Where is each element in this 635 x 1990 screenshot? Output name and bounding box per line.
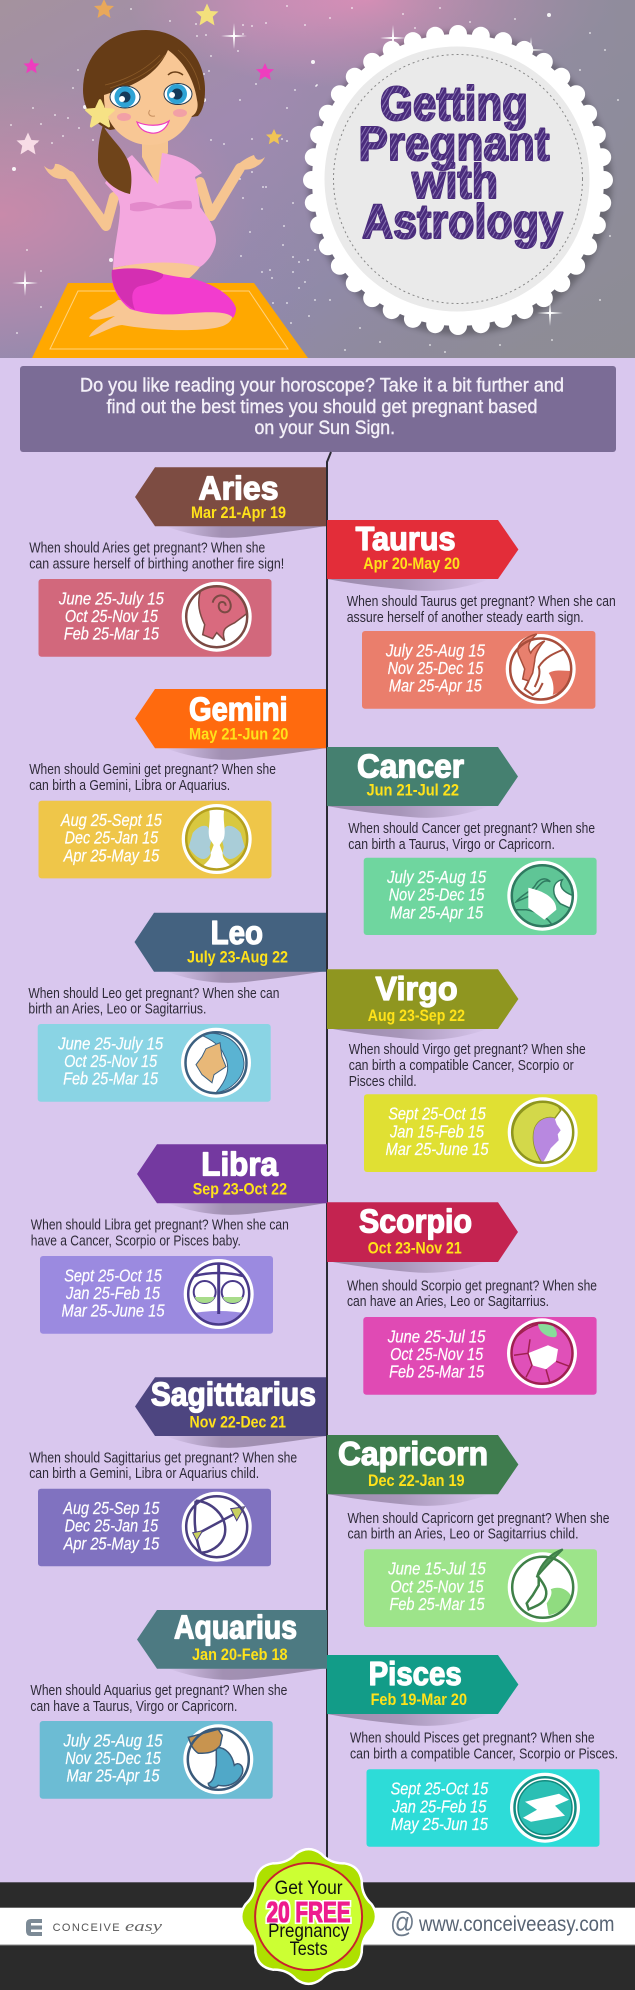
date box [38, 1489, 271, 1566]
best times: Jan 25-Feb 15 [65, 1283, 160, 1303]
dates: Mar 21-Apr 19 [191, 503, 286, 522]
shirt tie [130, 201, 192, 211]
dates: Oct 23-Nov 21 [368, 1238, 462, 1257]
badge text: Get Your [275, 1878, 343, 1899]
icon: fish [510, 1773, 580, 1843]
description: have a Cancer, Scorpio or Pisces baby. [31, 1232, 241, 1250]
blush and nose [117, 109, 187, 121]
dates: Jan 20-Feb 18 [192, 1645, 288, 1664]
best times: Oct 25-Nov 15 [65, 606, 158, 626]
date box [363, 1317, 597, 1395]
best times: Dec 25-Jan 15 [65, 1516, 158, 1536]
best times: June 15-Jul 15 [387, 1559, 486, 1579]
best times: Jan 15-Feb 15 [389, 1121, 484, 1141]
best times: Feb 25-Mar 15 [64, 624, 159, 644]
belly [113, 263, 200, 279]
description: can birth a Taurus, Virgo or Capricorn. [348, 836, 555, 853]
timeline spine [327, 452, 331, 1862]
badge shape [241, 1849, 376, 1984]
banner shadow [327, 579, 490, 591]
banner [327, 1202, 518, 1262]
dates: Nov 22-Dec 21 [190, 1412, 286, 1431]
illustration: pregnant woman [44, 30, 265, 337]
website: www.conceiveeasy.com [418, 1913, 614, 1936]
free tests badge [241, 1849, 376, 1984]
best times: June 25-July 15 [57, 1033, 163, 1053]
date box [38, 1024, 271, 1102]
scalloped frame shadow [308, 31, 612, 335]
banner shadow [327, 806, 490, 818]
banner [135, 1377, 326, 1436]
icon: lion [181, 1028, 251, 1098]
banner shadow [327, 1714, 490, 1726]
description: birth an Aries, Leo or Sagitarrius. [28, 1000, 206, 1018]
sign name: Taurus [356, 520, 456, 557]
smile [137, 121, 169, 133]
icon: water bearer [183, 1724, 253, 1794]
flower [86, 100, 114, 126]
intro panel [20, 366, 616, 452]
dates: Jun 21-Jul 22 [366, 780, 459, 799]
badge text [267, 1878, 351, 1960]
sparkles [12, 23, 563, 326]
description: can birth a Gemini, Libra or Aquarius. [29, 777, 230, 794]
banner [135, 689, 326, 748]
sign name: Gemini [189, 691, 288, 728]
panel: Aquarius [30, 1609, 327, 1799]
sign name: Scorpio [359, 1203, 472, 1240]
best times: Nov 25-Dec 15 [65, 1748, 161, 1768]
icon: ram [182, 582, 252, 652]
intro panel: Do you like reading your horoscope? Take it a bit further and [80, 376, 564, 396]
panel: footer [0, 1849, 635, 1990]
description: can have an Aries, Leo or Sagitarrius. [347, 1293, 549, 1310]
best times: Oct 25-Nov 15 [390, 1576, 484, 1596]
intro panel: find out the best times you should get pregnant based [106, 397, 538, 418]
panel: Gemini [29, 689, 326, 878]
dates: July 23-Aug 22 [187, 948, 288, 967]
neck [142, 138, 168, 188]
description: Pisces child. [349, 1073, 417, 1090]
sign name: Capricorn [338, 1435, 488, 1472]
sign name: Libra [201, 1145, 279, 1182]
banner [327, 969, 518, 1029]
best times: Sept 25-Oct 15 [64, 1265, 162, 1285]
dates: Apr 20-May 20 [363, 554, 460, 573]
best times: Aug 25-Sep 15 [63, 1498, 160, 1518]
best times: Apr 25-May 15 [63, 1533, 159, 1553]
best times: Nov 25-Dec 15 [388, 658, 483, 678]
banner shadow [327, 1261, 490, 1273]
date box [364, 1094, 597, 1172]
star dots [11, 6, 618, 352]
footer dark band [0, 1882, 635, 1990]
banner shadow [327, 1494, 490, 1506]
date box [40, 1721, 273, 1799]
badge inner [255, 1863, 362, 1970]
icon: goat [508, 1549, 578, 1622]
badge text: Tests [290, 1939, 328, 1960]
title: Astrology [362, 196, 563, 249]
banner [135, 467, 326, 526]
dates: May 21-Jun 20 [189, 724, 288, 743]
arms [70, 168, 240, 226]
best times: July 25-Aug 15 [385, 640, 485, 660]
banner shadow [165, 526, 326, 538]
dates: Feb 19-Mar 20 [371, 1690, 467, 1709]
best times: Dec 25-Jan 15 [65, 828, 158, 848]
description: When should Virgo get pregnant? When she [349, 1041, 586, 1058]
title: Pregnant [358, 118, 550, 171]
description: can have a Taurus, Virgo or Capricorn. [30, 1698, 237, 1715]
title: with [411, 156, 498, 209]
best times: Mar 25-Apr 15 [390, 902, 483, 922]
banner shadow [165, 1436, 326, 1448]
ponytail [98, 125, 131, 194]
panel: Scorpio [327, 1202, 597, 1395]
description: can birth a Gemini, Libra or Aquarius child. [29, 1465, 259, 1482]
best times: July 25-Aug 15 [63, 1730, 163, 1750]
logo icon [26, 1919, 42, 1936]
best times: Jan 25-Feb 15 [392, 1796, 487, 1816]
best times: Mar 25-June 15 [386, 1139, 489, 1159]
website: @ [390, 1907, 415, 1939]
best times: Feb 25-Mar 15 [63, 1069, 158, 1089]
sky background [0, 0, 635, 358]
logo [26, 1919, 162, 1936]
best times: Feb 25-Mar 15 [390, 1594, 485, 1614]
best times: Aug 25-Sept 15 [60, 810, 162, 830]
banner shadow [165, 748, 326, 760]
panel: Aries [29, 467, 326, 657]
best times: July 25-Aug 15 [386, 867, 486, 887]
hair back [83, 30, 205, 130]
website [390, 1907, 614, 1939]
dates: Sep 23-Oct 22 [193, 1179, 287, 1198]
panel: Pisces [327, 1655, 618, 1847]
panel: Virgo [327, 969, 597, 1172]
sign name: Pisces [369, 1655, 462, 1692]
face [104, 50, 198, 145]
banner [327, 1655, 518, 1714]
legs and feet [89, 300, 232, 337]
banner [137, 1144, 327, 1203]
hair strands [105, 50, 200, 90]
sign name: Virgo [376, 970, 458, 1007]
icon: maiden [508, 1097, 578, 1167]
panel: Taurus [327, 520, 616, 709]
best times: Feb 25-Mar 15 [389, 1362, 484, 1382]
best times: Sept 25-Oct 15 [388, 1104, 486, 1124]
description: When should Aries get pregnant? When she [29, 540, 265, 556]
best times: Mar 25-Apr 15 [66, 1766, 160, 1786]
description: When should Leo get pregnant? When she can [28, 985, 279, 1002]
description: can birth an Aries, Leo or Sagitarrius child. [348, 1526, 578, 1543]
logo wordmark: CONCEIVE [53, 1922, 120, 1934]
best times: Mar 25-Apr 15 [389, 676, 482, 696]
description: can assure herself of birthing another fire sign! [29, 556, 284, 572]
icon: scales [184, 1259, 254, 1329]
banner shadow [167, 1668, 326, 1680]
banner shadow [327, 1028, 490, 1040]
shirt [105, 153, 216, 268]
best times: June 25-July 15 [58, 588, 164, 608]
badge text: Pregnancy [268, 1921, 350, 1942]
icon: twins [182, 804, 252, 874]
best times: Apr 25-May 15 [63, 845, 159, 865]
badge text: 20 FREE [267, 1897, 351, 1929]
date box [364, 858, 597, 935]
description: When should Aquarius get pregnant? When she [30, 1682, 287, 1699]
icon: archer bow [182, 1492, 252, 1562]
best times: Oct 25-Nov 15 [64, 1051, 157, 1071]
intro panel: on your Sun Sign. [254, 418, 395, 439]
panel: Cancer [327, 747, 597, 935]
icon: crab [507, 861, 577, 931]
panel: Libra [31, 1144, 327, 1334]
sign name: Aquarius [174, 1609, 297, 1646]
title: Getting [380, 78, 528, 131]
sign name: Sagitttarius [151, 1376, 316, 1413]
dotted ring [334, 54, 582, 304]
footer white strip [0, 1908, 635, 1946]
date box [362, 631, 595, 709]
dates: Dec 22-Jan 19 [368, 1471, 465, 1490]
description: When should Sagittarius get pregnant? When she [29, 1450, 297, 1466]
hands [44, 155, 265, 179]
yoga mat [32, 283, 308, 358]
panel: hero header [0, 0, 635, 358]
best times: Nov 25-Dec 15 [389, 885, 485, 905]
best times: Oct 25-Nov 15 [390, 1344, 483, 1364]
date box [38, 801, 272, 878]
best times: June 25-Jul 15 [387, 1326, 486, 1346]
banner [134, 913, 326, 972]
icon: bull [506, 634, 576, 704]
shorts [112, 269, 236, 318]
icon: scorpion [507, 1318, 577, 1388]
disc [324, 46, 590, 312]
banner shadow [165, 971, 326, 983]
logo script: easy [125, 1919, 162, 1935]
date box [40, 1256, 273, 1334]
banner [327, 1435, 518, 1494]
panel: Capricorn [327, 1435, 610, 1627]
banner [327, 520, 518, 579]
date box [38, 579, 272, 657]
title badge [308, 31, 612, 335]
panel: Sagittarius [29, 1376, 326, 1566]
banner shadow [167, 1203, 326, 1215]
panel: Leo [28, 913, 326, 1102]
title [358, 78, 563, 249]
best times: Mar 25-June 15 [62, 1301, 165, 1321]
stars [16, 0, 282, 154]
description: When should Libra get pregnant? When she can [31, 1216, 289, 1234]
scalloped frame [312, 34, 604, 326]
date box [364, 1549, 597, 1627]
sign name: Cancer [357, 747, 464, 784]
sign name: Aries [198, 469, 278, 506]
best times: Sept 25-Oct 15 [391, 1779, 488, 1799]
banner [327, 747, 518, 806]
banner [137, 1610, 327, 1669]
description: When should Gemini get pregnant? When she [29, 761, 276, 778]
description: assure herself of another steady earth sign. [347, 609, 584, 626]
dates: Aug 23-Sep 22 [368, 1006, 465, 1025]
best times: May 25-Jun 15 [391, 1814, 488, 1834]
eyes [110, 72, 192, 108]
description: can birth a compatible Cancer, Scorpio or [349, 1057, 574, 1074]
sign name: Leo [211, 914, 263, 951]
date box [366, 1769, 600, 1847]
